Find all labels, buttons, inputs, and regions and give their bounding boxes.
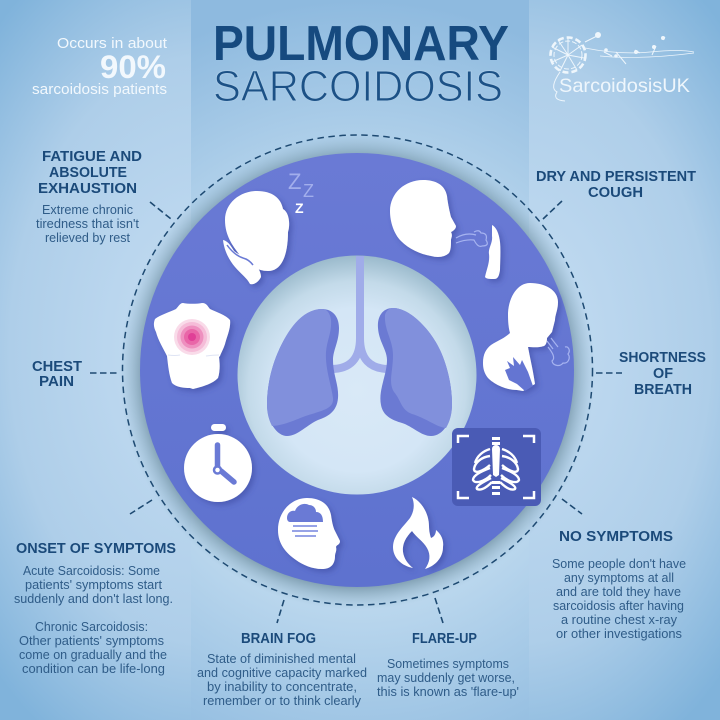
title [213,17,509,111]
label: no symptoms: NO SYMPTOMS [559,529,673,545]
label: flare-up: may suddenly get worse, [377,670,515,685]
label: flare-up: FLARE-UP [412,631,477,647]
callout: 90 percent of patients: Occurs in about [57,35,168,52]
icon: coughing head with hand [390,180,500,279]
icon: torso with chest pain [154,303,230,389]
callout: 90 percent of patients [32,35,168,98]
inner lung circle [238,256,476,494]
label: onset of symptoms: Acute Sarcoidosis: Some [23,563,160,578]
label: no symptoms: Some people don't have [552,556,686,571]
label: dry and persistent cough: COUGH [588,185,643,201]
icon: lungs [267,256,452,436]
icon: sleeping head with hand: Z [295,200,304,216]
icon: sleeping head with hand: Z [303,181,314,201]
symptom ring [140,153,574,587]
label: onset of symptoms: Chronic Sarcoidosis: [35,619,148,634]
icon: clock [184,424,252,502]
callout: 90 percent of patients: 90% [100,49,166,85]
label: fatigue and absolute exhaustion: EXHAUSTION [38,181,137,197]
label: fatigue and absolute exhaustion [36,149,142,245]
label: shortness of breath: SHORTNESS [619,350,706,366]
label: onset of symptoms: Other patients' symptoms [19,633,164,648]
title: PULMONARY [213,17,509,71]
label: flare-up [377,631,519,699]
icon: sleeping head with hand [223,169,314,284]
label: onset of symptoms: condition can be life-long [22,661,165,676]
callout: 90 percent of patients: sarcoidosis patients [32,81,167,98]
label: fatigue and absolute exhaustion: ABSOLUTE [49,165,127,181]
label: no symptoms: or other investigations [556,626,682,641]
label: fatigue and absolute exhaustion: Extreme chronic [42,202,133,217]
label: chest pain: PAIN [39,374,74,390]
icon: chest x-ray [452,428,541,506]
icon: person short of breath [483,283,569,391]
label: no symptoms: a routine chest x-ray [561,612,677,627]
label: fatigue and absolute exhaustion: tiredness that isn't [36,216,139,231]
label: no symptoms: and are told they have [556,584,681,599]
icon: brain fog head [278,498,340,569]
label: dry and persistent cough [536,169,696,201]
label: fatigue and absolute exhaustion: relieved by rest [45,230,130,245]
central circle diagram [119,134,595,610]
logo: SarcoidosisUK: SarcoidosisUK [559,75,690,97]
label: brain fog: BRAIN FOG [241,631,316,647]
label: onset of symptoms: ONSET OF SYMPTOMS [16,541,176,557]
label: brain fog: and cognitive capacity marked [197,665,367,680]
label: shortness of breath [619,350,706,398]
title: SARCOIDOSIS [213,62,503,111]
label: brain fog: remember or to think clearly [203,693,361,708]
label: onset of symptoms [14,541,176,676]
label: onset of symptoms: patients' symptoms start [25,577,162,592]
label: brain fog [197,631,367,708]
label: onset of symptoms: suddenly and don't last long. [14,591,173,606]
label: no symptoms [552,529,686,641]
label: fatigue and absolute exhaustion: FATIGUE AND [42,149,142,165]
label: shortness of breath: BREATH [634,382,692,398]
icon: flame [393,497,443,569]
label: brain fog: by inability to concentrate, [207,679,357,694]
connector lines [90,201,622,623]
label: dry and persistent cough: DRY AND PERSISTENT [536,169,696,185]
label: flare-up: Sometimes symptoms [387,656,509,671]
icon: sleeping head with hand: Z [288,169,301,194]
dashed outer ring [122,135,592,605]
label: flare-up: this is known as 'flare-up' [377,684,519,699]
label: brain fog: State of diminished mental [207,651,356,666]
label: no symptoms: any symptoms at all [564,570,674,585]
logo: SarcoidosisUK [550,32,694,101]
label: onset of symptoms: come on gradually and the [19,647,167,662]
label: no symptoms: sarcoidosis after having [553,598,684,613]
label: chest pain: CHEST [32,359,82,375]
label: shortness of breath: OF [653,366,673,382]
label: chest pain [32,359,82,390]
